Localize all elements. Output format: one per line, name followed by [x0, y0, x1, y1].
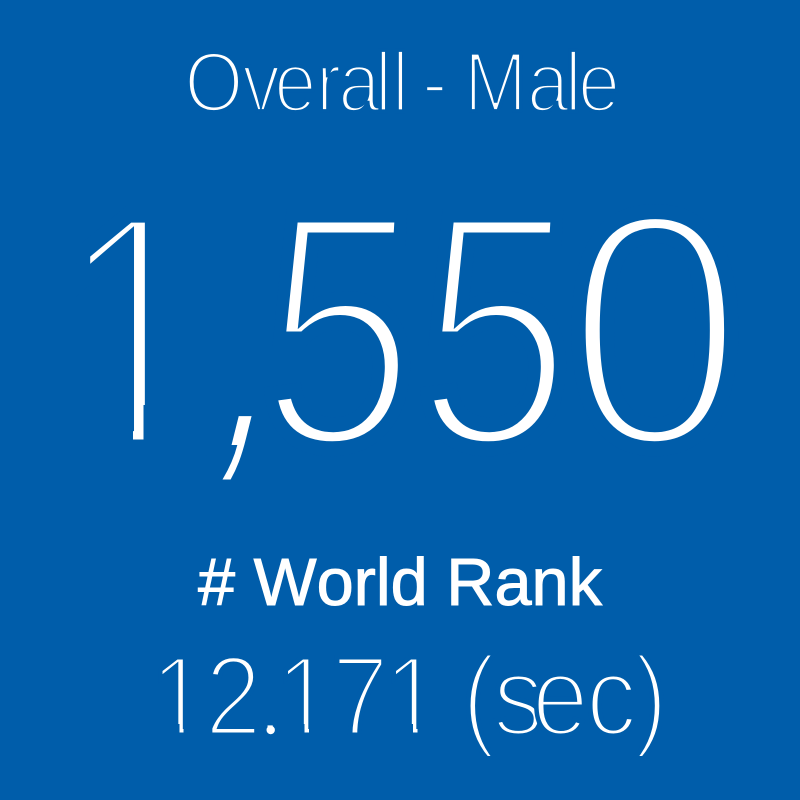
big number: world rank value: 0: [566, 144, 744, 517]
big number: world rank value: 5: [409, 143, 583, 517]
big number: world rank value: [56, 141, 744, 521]
big number: world rank value: 5: [253, 143, 427, 517]
label: world rank: # World Rank: [198, 545, 602, 620]
time value in seconds: 12.171 (sec): [150, 633, 668, 759]
title: Overall - Male: [185, 35, 620, 129]
big number: world rank value: ,: [205, 202, 317, 503]
big number: world rank value: 1: [56, 141, 213, 521]
